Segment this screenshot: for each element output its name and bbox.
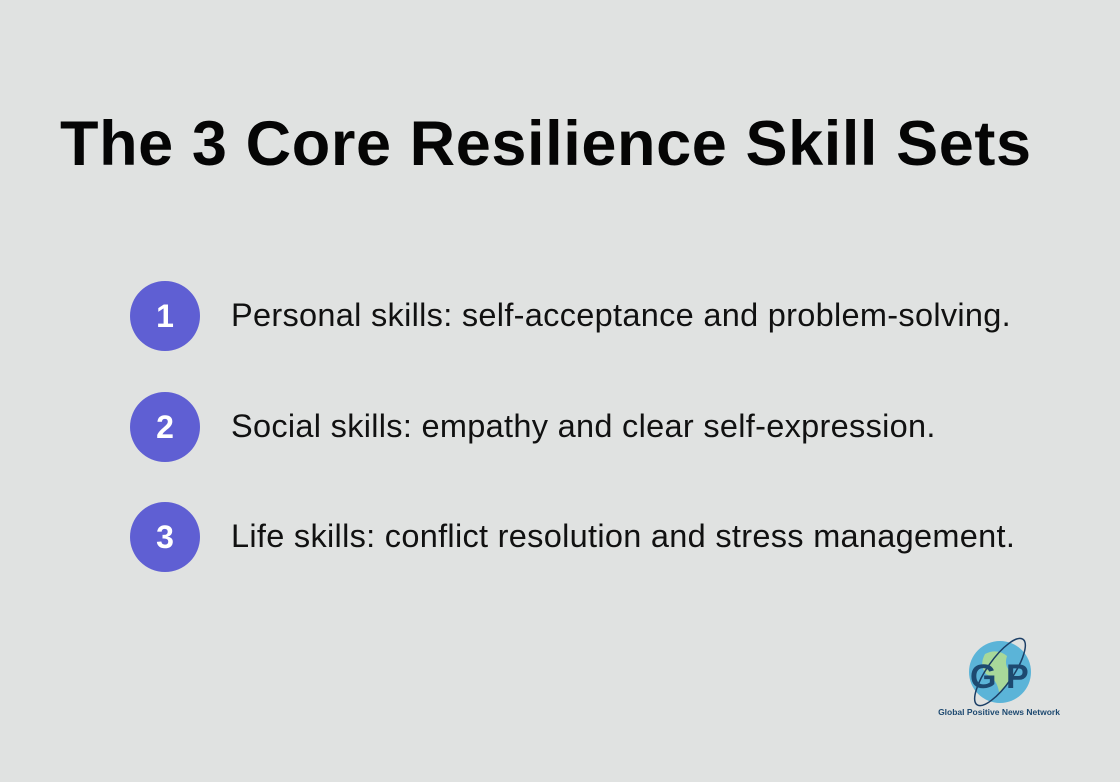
badge 1 bbox=[130, 281, 200, 351]
badge 1: 1 bbox=[156, 298, 174, 334]
logo: G bbox=[970, 658, 996, 696]
item 1: Personal skills: self-acceptance and problem-solving. bbox=[231, 297, 1011, 333]
badge 3 bbox=[130, 502, 200, 572]
item 2: Social skills: empathy and clear self-expression. bbox=[231, 408, 936, 444]
logo bbox=[938, 638, 1060, 717]
logo: P bbox=[1006, 658, 1029, 696]
item 3 bbox=[130, 502, 1015, 572]
logo: Global Positive News Network bbox=[938, 707, 1060, 717]
title: The 3 Core Resilience Skill Sets bbox=[60, 109, 1032, 179]
item 3: Life skills: conflict resolution and stress management. bbox=[231, 518, 1015, 554]
item 1 bbox=[130, 281, 1011, 351]
badge 3: 3 bbox=[156, 519, 174, 555]
badge 2 bbox=[130, 392, 200, 462]
item 2 bbox=[130, 392, 936, 462]
badge 2: 2 bbox=[156, 409, 174, 445]
